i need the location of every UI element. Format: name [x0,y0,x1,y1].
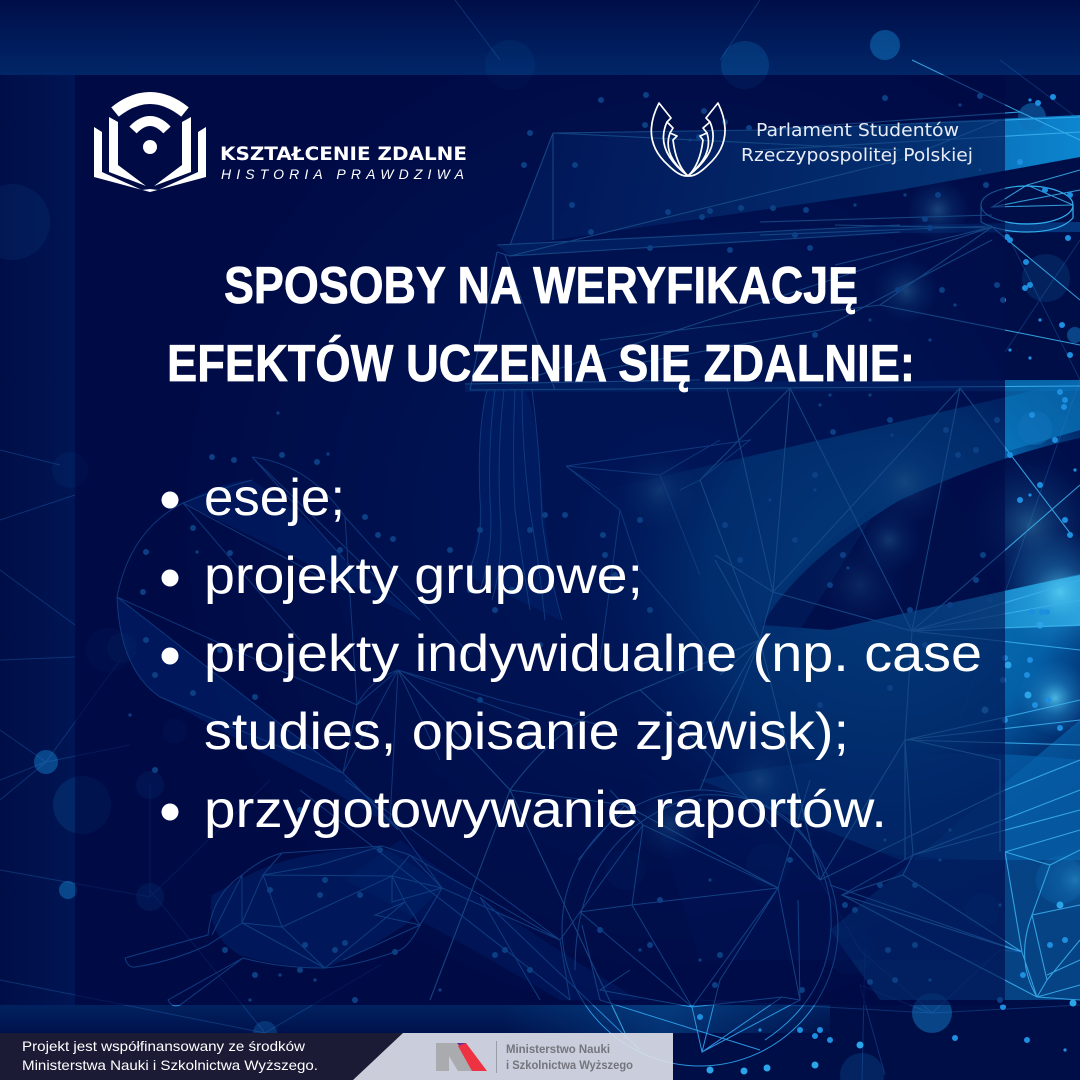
flask and left leaf lines [117,390,750,830]
logo: Kształcenie Zdalne [94,98,468,192]
item 1: eseje; [204,469,345,527]
ministry name: Ministerstwo Nauki [506,1044,610,1056]
glows [857,434,953,530]
bullet list [162,469,982,839]
panel: dark translucent square [75,75,1005,1005]
ministry panel [353,1033,673,1080]
left leaf fill [117,597,400,830]
footer note: Ministerstwa Nauki i Szkolnictwa Wyższego. [22,1057,318,1073]
particle dots [130,95,1075,1071]
footer note [22,1038,318,1073]
globe lines [560,780,1022,1066]
flask neck fill [467,390,560,620]
title: EFEKTÓW UCZENIA SIĘ ZDALNIE: [167,335,915,393]
logo wordmark: KSZTAŁCENIE ZDALNE [220,143,467,165]
logo tagline: HISTORIA PRAWDZIWA [221,166,468,182]
middle bright bands [760,575,1080,640]
item 3: projekty indywidualne (np. case [204,625,982,683]
top band [510,115,1080,245]
dark swoosh [762,438,1080,630]
footer note: Projekt jest współfinansowany ze środków [22,1038,306,1054]
item 3 [162,625,982,761]
item 2: projekty grupowe; [204,547,643,605]
icon: PSRP emblem [651,103,725,176]
footer: funding bar [0,1033,673,1080]
logo name line 2: Rzeczypospolitej Polskiej [741,145,973,166]
leaf lines [125,780,640,1050]
title: SPOSOBY NA WERYFIKACJĘ [224,257,858,315]
leaf fill [211,848,442,968]
icon: wifi book [94,98,206,192]
item 3: studies, opisanie zjawisk); [204,703,849,761]
ministry name: i Szkolnictwa Wyższego [506,1060,633,1072]
pill icon lines [981,186,1073,232]
blue glow region [560,380,1080,900]
network lines [398,60,1080,1033]
icon: ministry mark [436,1043,487,1071]
logo name line 1: Parlament Studentów [756,120,959,141]
title [167,257,915,393]
logo: Parlament Studentów RP [651,103,973,176]
item 4: przygotowywanie raportów. [204,781,887,839]
lower-left sweep [640,770,1005,960]
ministry name [506,1044,633,1072]
